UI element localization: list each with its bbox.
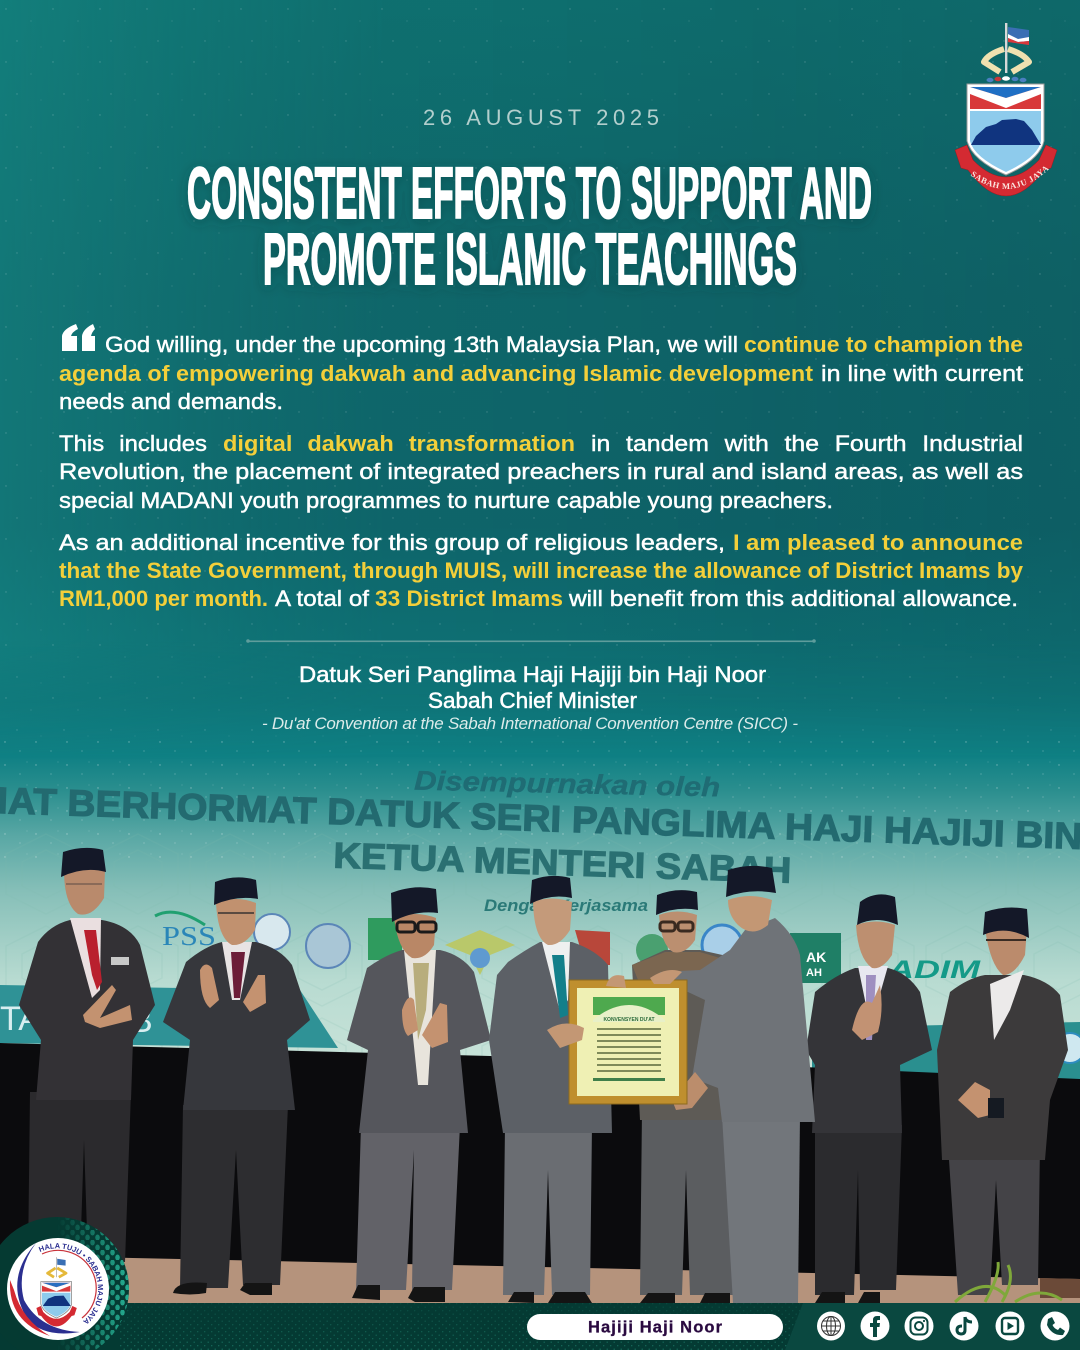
paragraph 3: that the State Government, through MUIS, will increase the allowance of District Imams by <box>59 558 1023 583</box>
crest flag <box>1005 23 1029 73</box>
social icons <box>817 1312 1070 1340</box>
man 4: chief minister <box>489 876 612 1303</box>
photo backdrop with convention text: MAT BERHORMAT DATUK SERI PANGLIMA HAJI HAJIJI BIN <box>0 779 1080 857</box>
man 6: presenter in grey suit <box>655 866 815 1303</box>
hands on frame <box>547 970 682 1048</box>
crest wreath <box>986 76 1026 82</box>
badge: Hala Tuju Sabah Maju Jaya <box>0 1217 129 1350</box>
paragraph 1: God willing, under the upcoming 13th Malaysia Plan, we will <box>105 332 738 357</box>
paragraph 3: A total of <box>275 586 370 611</box>
footer: dark green bar <box>0 1303 1080 1350</box>
photo: banner bands: TA <box>0 1000 41 1038</box>
photo backdrop with convention text: Disempurnakan oleh <box>414 766 721 802</box>
attribution: speaker name, role and event: Sabah Chief Minister <box>428 688 637 713</box>
attribution: speaker name, role and event: Datuk Seri Panglima Haji Hajiji bin Haji Noor <box>299 662 767 687</box>
name pill: Hajiji Haji Noor: Hajiji Haji Noor <box>588 1318 723 1336</box>
attribution: speaker name, role and event <box>262 662 798 733</box>
coat of arms: Sabah crest <box>954 23 1058 196</box>
framed certificate: KONVENSYEN DU'AT <box>603 1017 655 1023</box>
attribution: speaker name, role and event: - Du'at Convention at the Sabah International Convention Centre (SICC) - <box>262 714 798 733</box>
paragraph 2: Revolution, the placement of integrated preachers in rural and island areas, as well as <box>59 459 1023 484</box>
plant <box>955 1262 1062 1302</box>
photo: stage group ceremony <box>0 766 1080 1303</box>
icon: tiktok <box>950 1312 978 1340</box>
paragraph 3 <box>59 530 1023 611</box>
paragraph 3: will benefit from this additional allowance. <box>568 586 1018 611</box>
man 7 <box>806 894 932 1303</box>
photo: black stage curtain <box>0 1043 1080 1290</box>
photo backdrop with convention text: AH <box>806 967 822 979</box>
badge: Hala Tuju Sabah Maju Jaya: HALA TUJU • SABAH MAJU JAYA <box>38 1243 104 1324</box>
photo: banner bands <box>0 985 1080 1080</box>
paragraph 3: I am pleased to announce <box>733 530 1023 555</box>
photo backdrop with convention text: ADIM <box>887 956 982 984</box>
photo backdrop with convention text: Dengan Kerjasama <box>484 896 648 915</box>
paragraph 1: in line with current <box>821 361 1024 386</box>
paragraph 1: agenda of empowering dakwah and advancing Islamic development <box>59 361 814 386</box>
paragraph 2: special MADANI youth programmes to nurture capable young preachers. <box>59 488 833 513</box>
icon: phone <box>1040 1312 1070 1340</box>
date: 26 AUGUST 2025 <box>423 105 659 130</box>
man 2 <box>163 877 310 1295</box>
crest shield <box>967 84 1044 175</box>
paragraph 1 <box>59 332 1024 414</box>
icon: opening quotation mark <box>62 324 95 351</box>
paragraph 2: in tandem with the Fourth Industrial <box>591 431 1023 456</box>
photo backdrop with convention text: AK <box>806 949 826 965</box>
icon: instagram <box>904 1312 934 1340</box>
divider <box>246 639 816 643</box>
paragraph 3: RM1,000 per month. <box>59 586 268 611</box>
paragraph 2 <box>59 431 1023 513</box>
background: teal gradient <box>0 0 1080 1068</box>
name pill: Hajiji Haji Noor <box>527 1314 783 1340</box>
paragraph 3: As an additional incentive for this group of religious leaders, <box>59 530 725 555</box>
paragraph 2: digital dakwah transformation <box>223 431 575 456</box>
photo backdrop with convention text: PSS <box>162 921 216 951</box>
crest scroll motto: SABAH MAJU JAYA <box>970 166 1049 189</box>
paragraph 2: This includes <box>59 431 207 456</box>
photo backdrop with convention text: KETUA MENTERI SABAH <box>333 834 792 891</box>
photo: wooden floor <box>0 1255 1080 1303</box>
paragraph 1: needs and demands. <box>59 389 283 414</box>
title <box>187 154 872 300</box>
crest scroll motto <box>954 144 1058 196</box>
man 5 <box>632 890 745 1303</box>
photo: banner bands: B <box>130 1002 153 1040</box>
paragraph 1: continue to champion the <box>744 332 1023 357</box>
paragraph 3: 33 District Imams <box>375 586 563 611</box>
crest arms <box>984 49 1029 72</box>
icon: facebook <box>860 1312 890 1340</box>
man 8 <box>937 908 1068 1295</box>
man 1 <box>19 848 155 1262</box>
framed certificate <box>569 980 687 1104</box>
man 3 <box>347 887 491 1302</box>
photo backdrop with convention text <box>0 766 1080 1090</box>
badge crest <box>36 1257 77 1326</box>
icon: website globe <box>817 1312 845 1340</box>
icon: youtube play <box>996 1312 1024 1340</box>
